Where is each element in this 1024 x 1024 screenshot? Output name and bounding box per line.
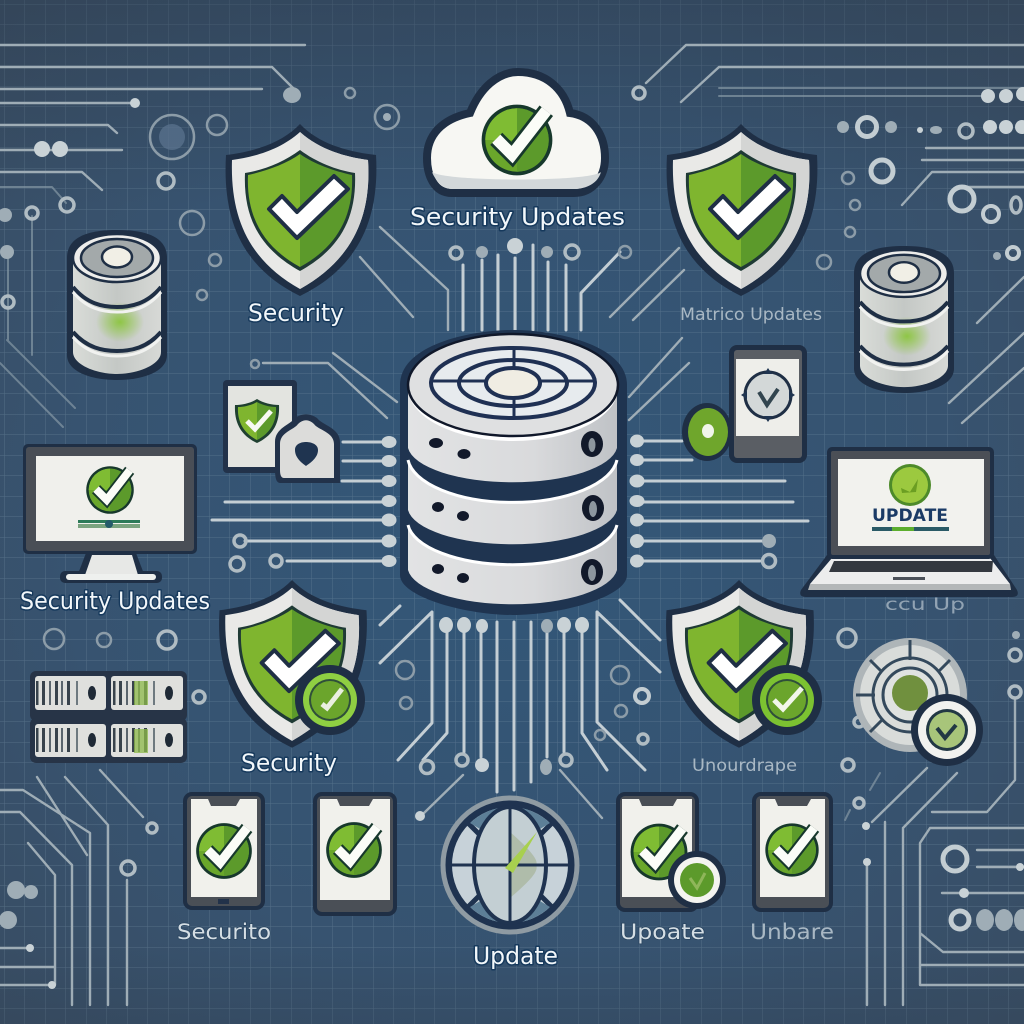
text: UPDATE on laptop: UPDATE: [872, 506, 948, 526]
icon: radar dial with badge: [853, 638, 983, 766]
icon: laptop: [800, 447, 1018, 597]
icon: shield with badge, lower left: [219, 580, 367, 748]
label: faded Up under laptop: ccu Up: [885, 595, 965, 615]
icon: globe: [443, 798, 577, 932]
icon: small database left: [67, 230, 167, 380]
heading: Security Updates (top): Security Updates: [410, 203, 625, 231]
label: Upoate: Upoate: [620, 920, 705, 944]
circuit traces: bottom left: [0, 629, 205, 1005]
circuit traces: top left: [0, 45, 399, 427]
label: Security top left: Security: [248, 299, 344, 327]
icon: server rack: [30, 671, 187, 763]
circuit traces: top right: [610, 45, 1024, 423]
label: faded updates: Matrico Updates: [680, 305, 822, 325]
icon: phone with check and badge: [616, 792, 726, 912]
top pins: [450, 238, 631, 330]
circuit traces: toward server, left: [251, 227, 448, 418]
left pins: [212, 436, 396, 571]
icon: phone with check 2: [313, 792, 397, 916]
label: Unbare: Unbare: [750, 920, 834, 944]
icon: shield with badge, lower right: [666, 580, 822, 748]
icon: central database server: [400, 330, 627, 615]
icon: shield top left: [226, 124, 376, 296]
right pins: [630, 434, 808, 568]
icon: phone with check 4: [752, 792, 833, 912]
label: Security Updates left: Security Updates: [20, 587, 210, 615]
label: Securito: Securito: [177, 920, 271, 944]
label: Update centre: Update: [473, 942, 558, 970]
label: faded lower right: Unourdrape: [692, 756, 797, 776]
icon: shield top right: [667, 124, 817, 296]
icon: cloud with check: [427, 72, 605, 193]
icon: small database right: [854, 246, 954, 393]
icon: phone with check 1: [183, 792, 265, 910]
label: Security lower left: Security: [241, 749, 337, 777]
circuit traces: bottom right: [838, 629, 1024, 1005]
icon: phone with dial and green badge: [682, 345, 807, 463]
bottom pins: [380, 600, 660, 821]
icon: desktop monitor: [23, 444, 197, 583]
icon: document with shield and lock: [223, 380, 340, 483]
